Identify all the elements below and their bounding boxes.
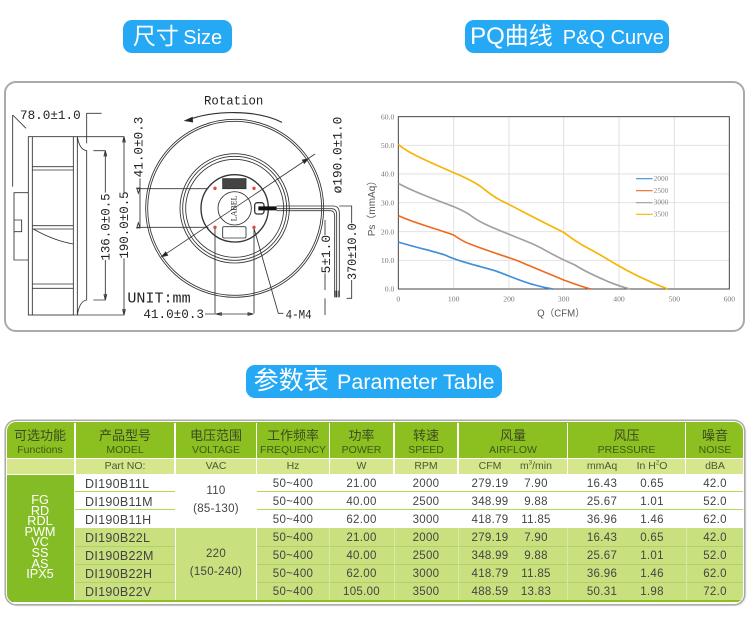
- row 7: 488.59: [472, 586, 508, 598]
- voltage 220: [190, 548, 242, 578]
- row 6: 3000: [413, 568, 439, 580]
- arrow: rotation: [185, 113, 282, 122]
- heading: parameter table: 参数表 Parameter Table: [254, 367, 494, 395]
- x axis labels: [396, 294, 735, 303]
- row 5: 40.00: [346, 550, 377, 562]
- table: parameters: 产品型号: [99, 428, 151, 443]
- row 4: 279.19: [472, 532, 508, 544]
- row 3: 11.85: [521, 514, 551, 526]
- voltage 220: 220: [206, 548, 226, 560]
- row 5: 50~400: [273, 550, 313, 562]
- x axis labels: 100: [448, 294, 460, 303]
- row 7: 13.83: [521, 586, 551, 598]
- dimension labels: Rotation: [204, 93, 263, 108]
- row 2: 52.0: [703, 496, 727, 508]
- table: parameters: 工作频率: [267, 428, 319, 443]
- row 1: [85, 477, 727, 491]
- header cells: Functions: [17, 444, 63, 456]
- row 7: 3500: [413, 586, 439, 598]
- series 3500: [398, 144, 668, 289]
- row 2: [85, 495, 727, 509]
- dimension lines: [77, 137, 283, 315]
- heading: size: 尺寸 Size: [133, 23, 222, 49]
- row 4: 7.90: [524, 532, 548, 544]
- header cells: [6, 423, 74, 458]
- table: parameters: NOISE: [699, 444, 731, 456]
- row 7: DI190B22V: [85, 585, 152, 599]
- diagram: fan dimensions: [12, 93, 360, 322]
- table: parameters: 噪音: [702, 428, 728, 443]
- row 7: 105.00: [343, 586, 380, 598]
- row 2: 348.99: [472, 496, 508, 508]
- row 4: 50~400: [273, 532, 313, 544]
- chart: PQ curve: [366, 112, 735, 320]
- row 5: 52.0: [703, 550, 727, 562]
- series 2000: [398, 242, 553, 289]
- sub header row: RPM: [414, 460, 438, 472]
- grid: [398, 117, 729, 289]
- x axis labels: 400: [613, 294, 625, 303]
- row 2: 50~400: [273, 496, 313, 508]
- table: parameters: SPEED: [408, 444, 444, 456]
- row 6: 418.79: [472, 568, 508, 580]
- dimension labels: 78.0±1.0: [20, 108, 81, 123]
- row 1: 0.65: [640, 478, 664, 490]
- inner white frame: [6, 421, 744, 604]
- table: parameters: 风量: [500, 428, 526, 443]
- row 3: 50~400: [273, 514, 313, 526]
- row 7: 72.0: [703, 586, 727, 598]
- functions column: FG: [31, 493, 49, 507]
- y axis labels: 20.0: [381, 227, 394, 236]
- series 3000: [398, 183, 630, 289]
- functions column: VC: [31, 535, 49, 549]
- voltage 110: [193, 485, 239, 515]
- header cells: 可选功能: [14, 428, 66, 443]
- table: parameters: POWER: [342, 444, 381, 456]
- dimension labels: ø190.0±1.0: [330, 117, 345, 193]
- sub header row: [7, 459, 743, 474]
- dimension labels: 370±10.0: [345, 223, 360, 280]
- table: parameters: 转速: [413, 428, 439, 443]
- y axis labels: 40.0: [381, 170, 394, 179]
- legend: 2500: [654, 186, 669, 195]
- row 2: 1.01: [640, 496, 664, 508]
- voltage 110: 110: [206, 485, 226, 497]
- row 6: 11.85: [521, 568, 551, 580]
- y axis labels: 60.0: [381, 112, 394, 121]
- heading: size: [123, 20, 232, 53]
- row 6: [85, 567, 727, 581]
- row 5: 2500: [413, 550, 439, 562]
- legend: 2000: [654, 174, 669, 183]
- table body backgrounds: [8, 421, 744, 602]
- plot frame: [398, 117, 729, 289]
- row 4: DI190B22L: [85, 531, 150, 545]
- row 3: 36.96: [587, 514, 617, 526]
- table: parameters: MODEL: [106, 444, 144, 456]
- y axis labels: 10.0: [381, 256, 394, 265]
- sub header row: W: [357, 460, 366, 472]
- table: parameters: 功率: [348, 428, 374, 443]
- row 7: 50~400: [273, 586, 313, 598]
- row 2: 25.67: [587, 496, 617, 508]
- dimension labels: 41.0±0.3: [132, 117, 147, 177]
- dimension labels: 190.0±0.5: [117, 191, 132, 259]
- functions column: RD: [31, 504, 49, 518]
- panel: drawing and chart: [4, 81, 745, 332]
- x axis labels: 600: [724, 294, 735, 303]
- row 6: 1.46: [640, 568, 664, 580]
- row 6: 62.0: [703, 568, 727, 580]
- voltage 220: (150-240): [190, 566, 242, 578]
- voltage 110: (85-130): [193, 503, 239, 515]
- table: parameters: [6, 421, 744, 604]
- dimension labels: 5±1.0: [319, 235, 334, 273]
- row 3: DI190B11H: [85, 513, 151, 527]
- sub header row: Part NO:: [105, 460, 145, 472]
- row 5: [85, 549, 727, 563]
- dimension labels: 4-M4: [286, 307, 312, 322]
- row 1: DI190B11L: [85, 477, 149, 491]
- x axis labels: 0: [396, 294, 400, 303]
- row 1: 50~400: [273, 478, 313, 490]
- y axis labels: 50.0: [381, 141, 394, 150]
- sub header row: m3/min: [520, 460, 552, 472]
- row 5: 348.99: [472, 550, 508, 562]
- functions column: [6, 475, 74, 602]
- row 1: 42.0: [703, 478, 727, 490]
- legend: 3000: [654, 198, 669, 207]
- functions column: IPX5: [26, 567, 54, 581]
- row 1: 2000: [413, 478, 439, 490]
- front view of fan: LABEL: [229, 195, 239, 221]
- row 1: 21.00: [346, 478, 377, 490]
- front view of fan: [146, 119, 324, 297]
- dimension labels: 136.0±0.5: [98, 193, 113, 261]
- row 7: 1.98: [640, 586, 664, 598]
- legend: [636, 174, 669, 219]
- y axis labels: 30.0: [381, 198, 394, 207]
- row 6: 50~400: [273, 568, 313, 580]
- table: parameters: VOLTAGE: [192, 444, 240, 456]
- dimension labels: [20, 93, 360, 322]
- table: parameters: 电压范围: [190, 428, 242, 443]
- row 3: [85, 513, 727, 527]
- sub header row: In H2O: [637, 460, 667, 472]
- row 5: 9.88: [524, 550, 548, 562]
- row 1: 279.19: [472, 478, 508, 490]
- sub header row: VAC: [206, 460, 226, 472]
- row 3: 3000: [413, 514, 439, 526]
- functions column: SS: [32, 546, 48, 560]
- table: parameters: 风压: [613, 428, 640, 443]
- dimension labels: 41.0±0.3: [143, 307, 204, 322]
- heading: PQ curve: PQ曲线 P&Q Curve: [470, 23, 664, 50]
- y axis labels: 0.0: [385, 285, 394, 294]
- table: parameters: AIRFLOW: [489, 444, 537, 456]
- dimension labels: UNIT:mm: [127, 292, 191, 308]
- functions column: AS: [32, 557, 48, 571]
- table: parameters: FREQUENCY: [260, 444, 326, 456]
- sub header row: dBA: [705, 460, 725, 472]
- row 2: 9.88: [524, 496, 548, 508]
- table: parameters: PRESSURE: [598, 444, 655, 456]
- row 1: 7.90: [524, 478, 548, 490]
- functions column: PWM: [24, 525, 56, 539]
- row 4: 0.65: [640, 532, 664, 544]
- row 3: 62.00: [346, 514, 377, 526]
- row 3: 62.0: [703, 514, 727, 526]
- series 2500: [398, 216, 591, 289]
- row 2: 40.00: [346, 496, 377, 508]
- x axis labels: 500: [669, 294, 680, 303]
- sub header row: Hz: [287, 460, 299, 472]
- row 4: 21.00: [346, 532, 377, 544]
- row 6: DI190B22H: [85, 567, 152, 581]
- legend: 3500: [654, 210, 669, 219]
- row 5: DI190B22M: [85, 549, 154, 563]
- row 4: 42.0: [703, 532, 727, 544]
- x axis labels: 300: [558, 294, 570, 303]
- sub header row: mmAq: [587, 460, 617, 472]
- row 5: 1.01: [640, 550, 664, 562]
- row 6: 62.00: [346, 568, 377, 580]
- x axis labels: 200: [503, 294, 515, 303]
- x axis title: Q（CFM）: [537, 308, 585, 320]
- row 4: 16.43: [587, 532, 617, 544]
- y axis labels: [381, 112, 394, 294]
- row 7: [85, 585, 727, 599]
- side view of fan: [13, 113, 102, 315]
- row 2: DI190B11M: [85, 495, 153, 509]
- sub header row: CFM: [479, 460, 501, 472]
- row 4: 2000: [413, 532, 439, 544]
- row 3: 1.46: [640, 514, 664, 526]
- row 5: 25.67: [587, 550, 617, 562]
- row 3: 418.79: [472, 514, 508, 526]
- row 7: 50.31: [587, 586, 617, 598]
- row 2: 2500: [413, 496, 439, 508]
- cable: [255, 203, 352, 315]
- row 6: 36.96: [587, 568, 617, 580]
- functions column: RDL: [27, 514, 53, 528]
- row 4: [85, 531, 727, 545]
- y axis title: Ps（mmAq）: [366, 176, 378, 236]
- row 1: 16.43: [587, 478, 617, 490]
